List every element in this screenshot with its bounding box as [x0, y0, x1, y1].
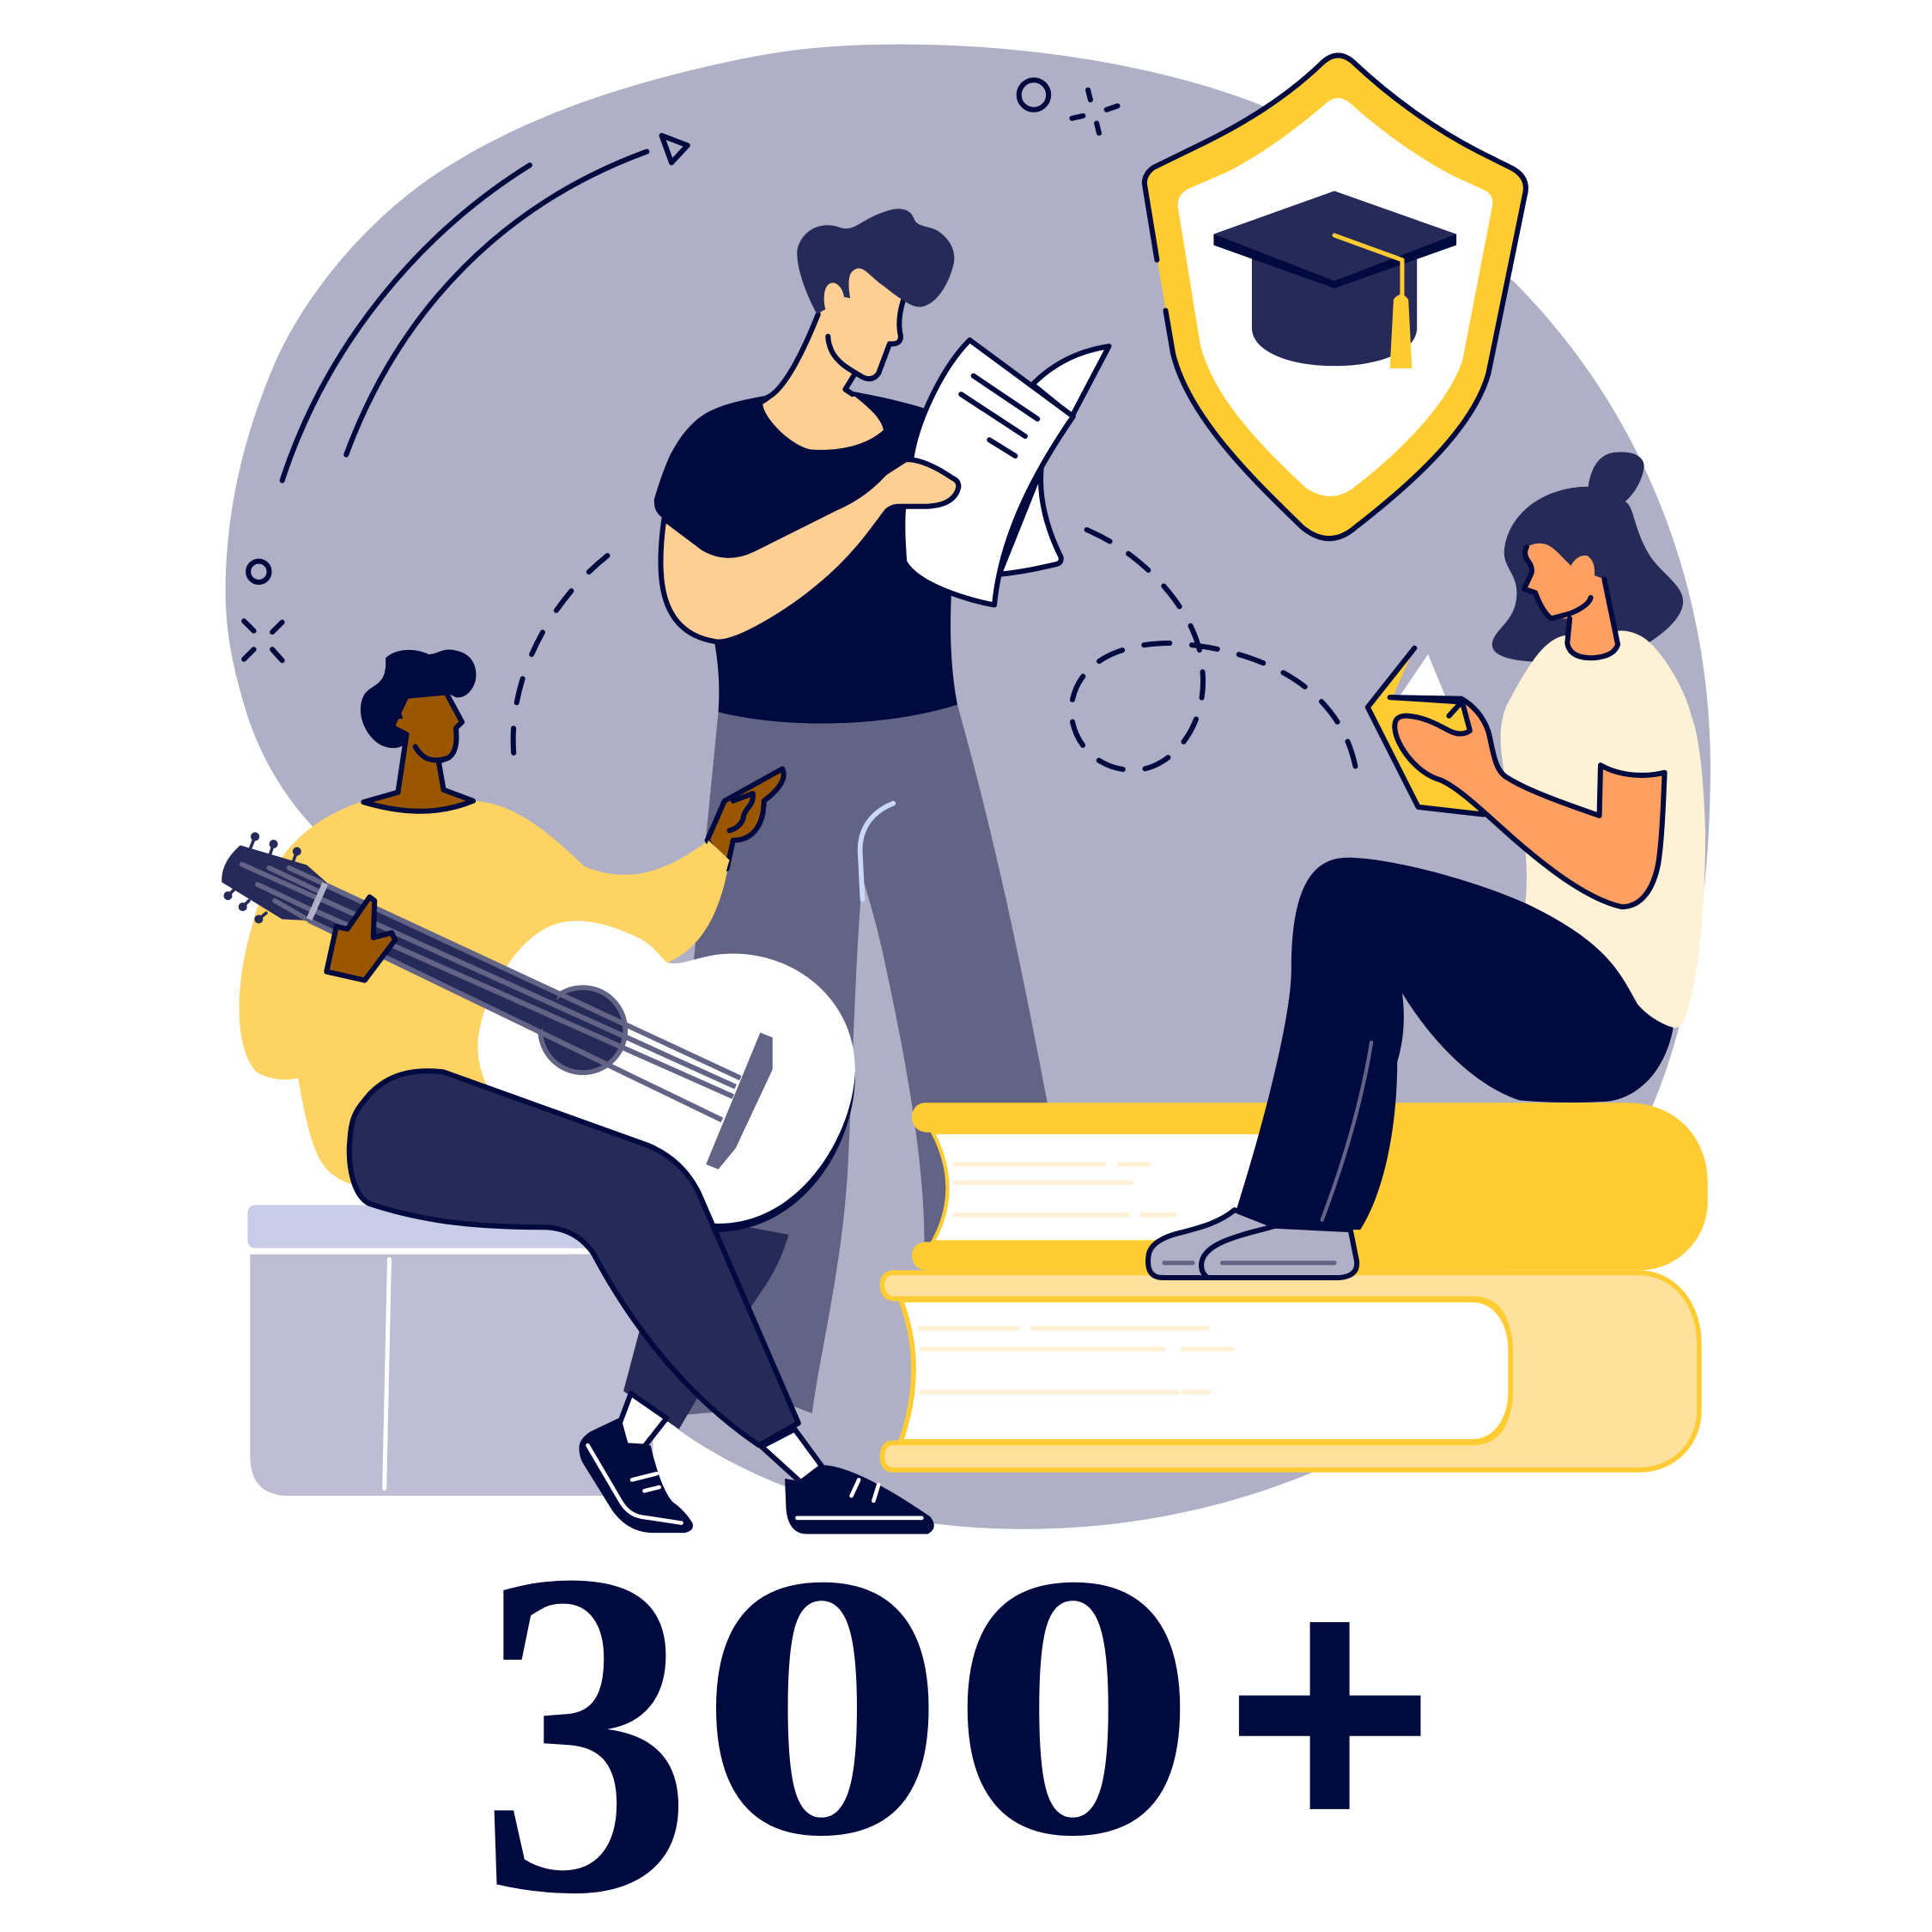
arm: [1394, 699, 1665, 907]
neck and head: [363, 692, 473, 811]
shirt: [240, 801, 729, 1189]
plucking hand: [708, 769, 784, 869]
hair: [1492, 452, 1683, 662]
headline 300+: [478, 1474, 1432, 1932]
headline 300+: 0: [697, 1498, 948, 1914]
fretting hand: [326, 897, 395, 981]
dashed flight paths: [513, 530, 1355, 770]
headstock: [222, 845, 328, 920]
neck and face: [762, 265, 903, 450]
nut: [309, 884, 325, 919]
standing man torso and head: [654, 209, 961, 724]
shoes: [1148, 1210, 1357, 1278]
bottom book: [882, 1273, 1699, 1470]
bench: [247, 1205, 653, 1496]
guitarist trousers: [349, 1071, 799, 1445]
hair: [361, 649, 476, 748]
guitar body: [477, 921, 855, 1224]
standing man legs: [623, 705, 1048, 1430]
trousers: [1236, 858, 1674, 1230]
graduation cap: [1213, 191, 1456, 368]
guitar shadow: [478, 1048, 855, 1232]
shield with graduation cap: [1145, 56, 1526, 538]
strings: [308, 884, 740, 1120]
shirt: [1501, 631, 1705, 1028]
bridge: [706, 1032, 773, 1170]
standing man arm: [660, 459, 958, 642]
paper held by standing man: [902, 340, 1109, 605]
hair: [797, 209, 954, 314]
sound hole: [540, 987, 625, 1072]
reading woman: [1148, 452, 1705, 1278]
neck and face: [1523, 544, 1618, 658]
books stack: [882, 1103, 1708, 1470]
shirt: [654, 391, 961, 724]
top book: [912, 1103, 1708, 1270]
neck: [306, 884, 559, 1031]
guitar: [222, 832, 855, 1232]
headline 300+: +: [1227, 1509, 1432, 1918]
headline 300+: 0: [948, 1498, 1199, 1914]
background blob: [226, 45, 1710, 1529]
standing man left shoe: [579, 1394, 693, 1533]
guitarist: [240, 649, 784, 1189]
decorative arcs and sparkles: [244, 80, 1117, 660]
book: [1368, 648, 1484, 815]
guitarist right shoe: [762, 1430, 934, 1534]
